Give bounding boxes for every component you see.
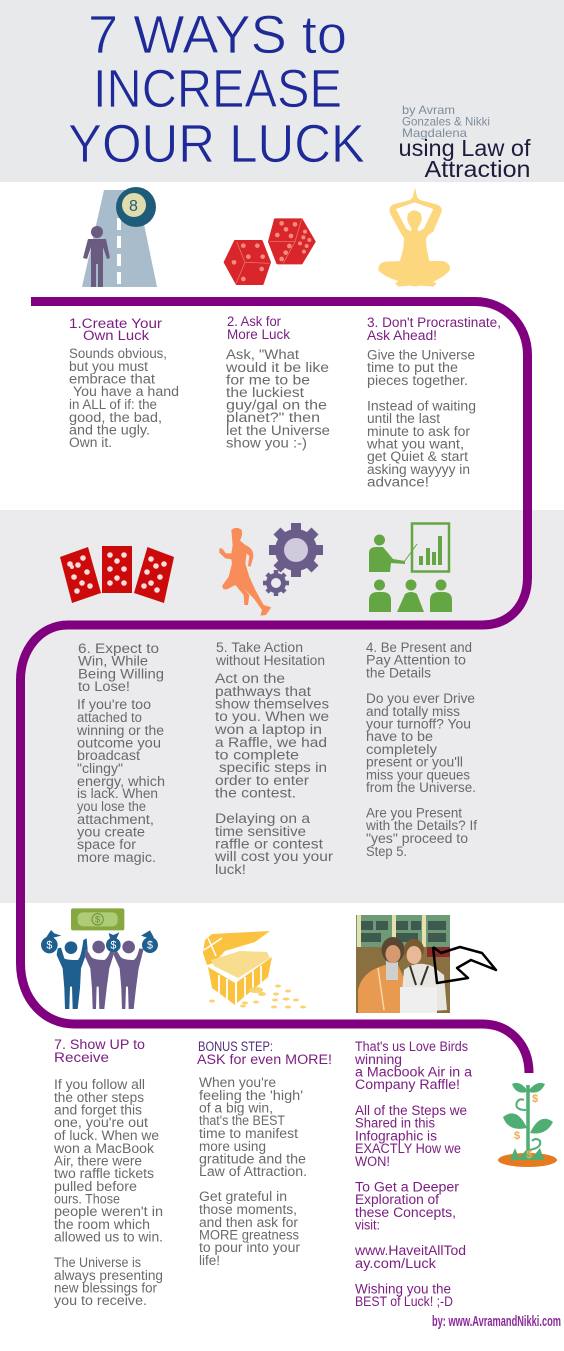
title: 7 WAYS to <box>88 5 347 65</box>
step 6 body: winning or the <box>76 723 164 738</box>
step 5 heading <box>215 640 325 668</box>
step 6 heading: Being Willing <box>78 666 164 682</box>
step 7 heading: Receive <box>54 1050 109 1065</box>
step 5 body: will cost you your <box>214 849 334 864</box>
bonus step body: more using <box>199 1139 266 1154</box>
closing message: visit: <box>355 1218 380 1232</box>
bonus step body: When you're <box>199 1075 276 1090</box>
step 7 body: Air, there were <box>54 1154 142 1168</box>
bonus step body: life! <box>199 1253 220 1268</box>
step 1 heading: 1.Create Your <box>69 316 163 331</box>
closing message: Infographic is <box>355 1128 437 1144</box>
step 4 body: have to be <box>366 729 433 744</box>
step 5 body <box>214 671 334 877</box>
icon: money plant: $ <box>526 1149 532 1161</box>
bonus step body: of a big win, <box>199 1100 273 1116</box>
step 3 body: time to put the <box>367 360 458 375</box>
step 4 body: and totally miss <box>366 704 460 719</box>
header band <box>0 0 564 182</box>
step 7 body: you to receive. <box>54 1293 147 1308</box>
subtitle <box>398 135 531 182</box>
middle band <box>0 510 564 903</box>
step 4 body: Are you Present <box>366 806 462 820</box>
step 4 body: Do you ever Drive <box>366 691 475 706</box>
step 7 body: won a MacBook <box>53 1141 154 1156</box>
closing message: a Macbook Air in a <box>355 1064 473 1080</box>
step 4 body: "yes" proceed to <box>366 831 468 846</box>
step 7 body: The Universe is <box>54 1255 141 1270</box>
title <box>68 5 365 174</box>
authors: Magdalena <box>402 126 467 140</box>
bonus step body: those moments, <box>199 1202 297 1217</box>
closing message: EXACTLY How we <box>355 1141 461 1156</box>
step 5 body: order to enter <box>215 773 310 788</box>
icon: money plant: $ <box>514 1130 520 1142</box>
icon: gears <box>263 523 323 596</box>
closing message: BEST of Luck! ;-D <box>355 1294 453 1309</box>
step 2 heading: More Luck <box>227 327 290 342</box>
bonus step body <box>199 1075 307 1268</box>
step 1 body <box>69 346 179 450</box>
step 5 body: luck! <box>215 862 246 877</box>
step 7 body: new blessings for <box>54 1280 157 1296</box>
step 3 heading <box>367 315 501 343</box>
closing message: Wishing you the <box>355 1282 451 1296</box>
step 3 body: what you want, <box>366 436 464 452</box>
step 7 body: and forget this <box>54 1102 142 1118</box>
step 6 body: you create <box>77 824 145 840</box>
step 2 body: planet?" then <box>226 410 320 425</box>
step 5 body: Delaying on a <box>215 811 311 826</box>
step 3 body: minute to ask for <box>367 424 471 439</box>
step 6 body: more magic. <box>77 850 156 865</box>
step 1 body: good, the bad, <box>69 410 162 425</box>
step 5 heading: without Hesitation <box>215 653 325 668</box>
step 1 heading <box>69 316 163 343</box>
step 1 body: Own it. <box>69 435 112 450</box>
step 7 body: of luck. When we <box>54 1128 159 1143</box>
step 7 body: the other steps <box>54 1090 144 1105</box>
icon: presenter and audience <box>369 524 452 612</box>
icon: people with money: $ <box>110 940 116 952</box>
step 7 body: If you follow all <box>54 1077 145 1092</box>
icon: meditating figure <box>378 188 450 287</box>
icon: dice <box>225 219 315 284</box>
step 3 body: Instead of waiting <box>367 398 476 414</box>
step 5 body: a Raffle, we had <box>215 735 327 750</box>
closing message: That's us Love Birds <box>355 1039 468 1054</box>
closing message: Company Raffle! <box>355 1077 460 1092</box>
step 1 body: in ALL of if: the <box>69 397 157 412</box>
subtitle: using Law of <box>398 135 531 161</box>
step 6 body: "clingy" <box>77 761 123 776</box>
step 5 body: show themselves <box>215 696 329 712</box>
step 6 body: outcome you <box>77 736 161 750</box>
bonus step body: Law of Attraction. <box>199 1164 307 1179</box>
bonus step body: feeling the 'high' <box>199 1088 303 1103</box>
step 7 body: pulled before <box>54 1179 137 1194</box>
step 4 body <box>365 691 477 859</box>
purple path <box>20 302 529 1073</box>
icon: money plant <box>498 1083 557 1167</box>
authors <box>402 103 490 140</box>
step 3 heading: 3. Don't Procrastinate, <box>367 315 501 330</box>
closing message <box>354 1039 473 1309</box>
step 2 body: let the Universe <box>226 423 330 438</box>
step 6 heading: 6. Expect to <box>78 641 159 656</box>
step 4 body: present or you'll <box>366 754 463 770</box>
step 4 heading: 4. Be Present and <box>366 640 472 655</box>
step 5 body: to you. When we <box>215 709 329 724</box>
bonus step body: to pour into your <box>199 1240 301 1255</box>
bonus step body: time to manifest <box>199 1126 298 1141</box>
step 5 body: raffle or contest <box>215 836 323 852</box>
title: INCREASE <box>93 59 342 119</box>
step 3 body: Give the Universe <box>367 348 475 362</box>
closing message: To Get a Deeper <box>355 1180 460 1194</box>
icon: road with person and 8 ball: 8 <box>129 198 138 215</box>
bonus step body: gratitude and the <box>199 1152 306 1166</box>
title: YOUR LUCK <box>68 114 365 174</box>
closing message: ay.com/Luck <box>355 1256 436 1271</box>
closing message: these Concepts, <box>355 1205 456 1220</box>
icon: playing cards <box>60 546 174 603</box>
step 2 body <box>225 347 330 450</box>
step 6 body: space for <box>77 837 137 852</box>
bonus step heading <box>197 1039 332 1067</box>
step 4 body: from the Universe. <box>366 780 476 795</box>
step 4 body: your turnoff? You <box>366 716 471 732</box>
step 5 body: to complete <box>215 748 299 762</box>
bonus step body: and then ask for <box>199 1215 299 1230</box>
step 1 body: You have a hand <box>73 384 179 399</box>
step 5 body: the contest. <box>215 786 296 800</box>
photo of the couple <box>356 915 450 1013</box>
step 6 body: broadcast <box>77 748 140 763</box>
closing message: Exploration of <box>355 1192 439 1207</box>
closing message: www.HaveitAllTod <box>354 1243 466 1258</box>
icon: people with money: $ <box>95 915 101 925</box>
step 3 body: get Quiet & start <box>367 449 468 464</box>
step 4 heading: Pay Attention to <box>366 652 466 668</box>
step 5 body: pathways that <box>215 684 311 699</box>
bonus step heading: BONUS STEP: <box>198 1039 273 1054</box>
bonus step heading: ASK for even MORE! <box>197 1052 332 1067</box>
icon: road with person and 8 ball <box>82 187 157 287</box>
step 2 body: for me to be <box>226 372 310 388</box>
step 3 heading: Ask Ahead! <box>367 328 437 343</box>
step 5 heading: 5. Take Action <box>216 640 303 655</box>
step 7 body: one, you're out <box>54 1115 148 1130</box>
step 7 heading <box>54 1037 145 1065</box>
step 3 body <box>366 348 476 490</box>
bonus step body: that's the BEST <box>199 1113 285 1128</box>
step 2 heading: 2. Ask for <box>227 314 281 329</box>
step 3 body: advance! <box>367 474 429 490</box>
step 3 body: until the last <box>367 411 440 426</box>
step 2 body: the luckiest <box>226 385 304 400</box>
step 4 heading: the Details <box>366 666 431 680</box>
step 2 body: guy/gal on the <box>226 398 327 412</box>
bonus step body: Get grateful in <box>199 1189 287 1204</box>
step 7 body: people weren't in <box>54 1204 163 1219</box>
step 5 body: won a laptop in <box>214 722 322 737</box>
icon: treasure chest <box>203 931 306 1008</box>
step 6 body: you lose the <box>77 799 146 814</box>
step 7 heading: 7. Show UP to <box>54 1037 145 1052</box>
closing message: WON! <box>355 1154 390 1169</box>
step 5 body: time sensitive <box>215 824 306 839</box>
step 6 body <box>76 697 165 865</box>
bonus step body: MORE greatness <box>199 1228 299 1242</box>
step 7 body: ours. Those <box>54 1192 120 1206</box>
icon: people with money <box>41 908 158 1009</box>
step 4 body: with the Details? If <box>365 818 477 833</box>
step 1 body: embrace that <box>69 372 155 386</box>
step 4 heading <box>366 640 472 680</box>
step 3 body: asking wayyyy in <box>367 462 470 477</box>
step 7 body: always presenting <box>54 1268 163 1283</box>
step 2 body: Ask, "What <box>226 347 299 362</box>
step 7 body: allowed us to win. <box>54 1230 163 1244</box>
step 3 body: pieces together. <box>367 373 468 388</box>
step 1 heading: Own Luck <box>83 328 149 343</box>
step 4 body: completely <box>366 742 437 757</box>
closing message: All of the Steps we <box>355 1103 467 1118</box>
step 6 heading: Win, While <box>78 654 148 668</box>
step 5 body: specific steps in <box>219 760 327 775</box>
step 5 body: Act on the <box>215 671 285 686</box>
step 6 heading <box>78 641 164 694</box>
step 6 body: attachment, <box>77 812 154 827</box>
step 2 heading <box>227 314 290 342</box>
step 6 body: If you're too <box>77 697 151 712</box>
step 1 body: Sounds obvious, <box>69 346 167 361</box>
closing message: Shared in this <box>355 1116 435 1130</box>
step 1 body: and the ugly. <box>69 422 150 438</box>
step 2 body: would it be like <box>225 360 329 375</box>
step 6 heading: to Lose! <box>78 679 130 694</box>
icon: money plant: $ <box>532 1093 538 1105</box>
step 7 body: the room which <box>54 1217 150 1232</box>
step 4 body: miss your queues <box>366 768 470 782</box>
authors: by Avram <box>402 103 455 117</box>
step 6 body: energy, which <box>77 774 165 789</box>
icon: people with money: $ <box>46 940 52 952</box>
icon: people with money: $ <box>147 940 153 952</box>
step 6 body: is lack. When <box>77 786 158 801</box>
step 7 body: two raffle tickets <box>54 1166 154 1181</box>
step 2 body: show you :-) <box>226 436 307 450</box>
closing message: winning <box>354 1052 402 1067</box>
step 7 body <box>53 1077 163 1308</box>
icon: runner <box>219 528 271 616</box>
authors: Gonzales & Nikki <box>402 114 490 128</box>
subtitle: Attraction <box>424 156 530 182</box>
step 6 body: attached to <box>77 710 142 725</box>
arrow: hand drawn <box>433 947 496 983</box>
step 1 body: but you must <box>69 359 148 374</box>
step 4 body: Step 5. <box>366 844 407 859</box>
